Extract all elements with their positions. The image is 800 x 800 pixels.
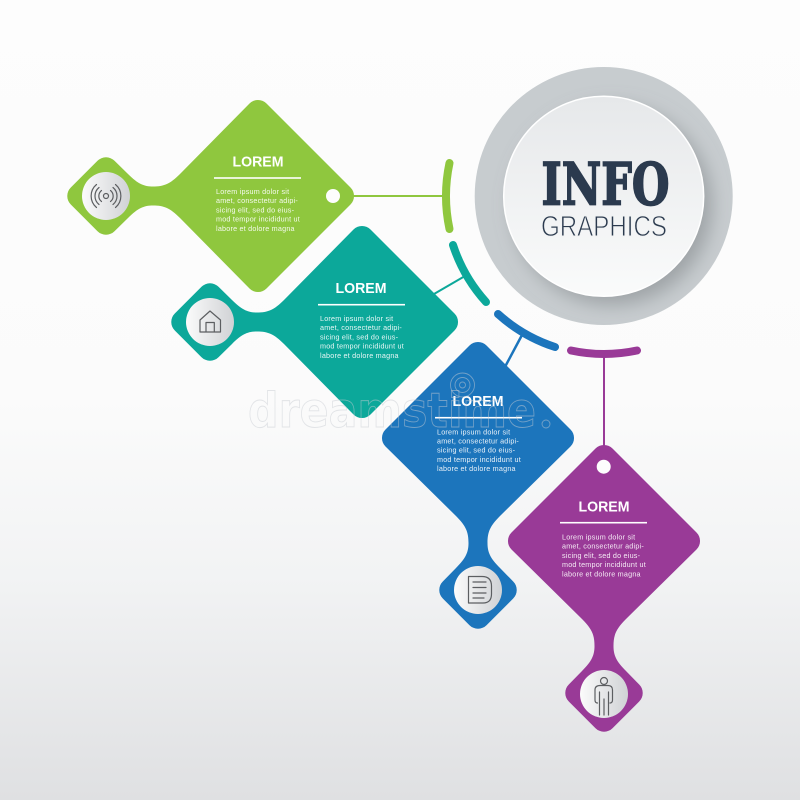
body text: sicing elit, sed do eius- (320, 332, 399, 341)
heading rule (214, 177, 301, 179)
title: INFO: INFO (542, 150, 670, 218)
outer ring (475, 67, 733, 325)
body text: labore et dolore magna (320, 351, 399, 360)
arc: green (354, 163, 450, 229)
watermark registered mark (542, 420, 550, 428)
body text: sicing elit, sed do eius- (437, 446, 516, 455)
arc: teal (434, 245, 486, 302)
body text: mod tempor incididunt ut (437, 455, 521, 464)
icon button: person (580, 670, 628, 718)
watermark: dreamstime (248, 383, 536, 439)
panel: teal (171, 226, 458, 418)
body text: Lorem ipsum dolor sit (320, 314, 393, 323)
body text: mod tempor incididunt ut (320, 342, 404, 351)
heading: LOREM (452, 393, 504, 410)
body text: labore et dolore magna (437, 464, 516, 473)
connector lines and arcs (354, 163, 637, 445)
heading rule (318, 304, 405, 306)
icon button: signal (82, 172, 130, 220)
icon button: document (454, 566, 502, 614)
body text: labore et dolore magna (562, 569, 641, 578)
body text: amet, consectetur adipi- (216, 196, 298, 205)
body text: amet, consectetur adipi- (437, 436, 519, 446)
body text: amet, consectetur adipi- (320, 323, 402, 332)
purple kite shape (508, 445, 700, 732)
body text: Lorem ipsum dolor sit (216, 187, 289, 196)
icon button: house (186, 298, 234, 346)
body text: Lorem ipsum dolor sit (437, 427, 510, 436)
body text: sicing elit, sed do eius- (216, 205, 295, 214)
watermark spiral (450, 373, 474, 397)
panel: purple (508, 445, 700, 732)
arc: purple (571, 350, 637, 445)
body text: mod tempor incididunt ut (216, 215, 300, 224)
heading rule (560, 522, 647, 524)
disc shadow (512, 105, 712, 305)
body text: sicing elit, sed do eius- (562, 551, 641, 560)
heading rule (435, 417, 522, 418)
heading: LOREM (232, 154, 284, 170)
body text: amet, consectetur adipi- (562, 542, 644, 551)
inner disc (504, 96, 704, 296)
body text: Lorem ipsum dolor sit (562, 532, 635, 542)
body text: mod tempor incididunt ut (562, 560, 646, 569)
heading: LOREM (578, 498, 630, 516)
central circle (475, 67, 733, 325)
title: GRAPHICS: GRAPHICS (541, 211, 667, 243)
panel: green (67, 100, 354, 292)
teal kite shape (171, 226, 458, 418)
hole (597, 460, 611, 474)
blue kite shape (382, 342, 574, 629)
heading: LOREM (336, 280, 386, 297)
hole (326, 189, 340, 203)
green kite shape (67, 100, 354, 292)
panel: blue (382, 342, 574, 629)
arc: blue (498, 314, 555, 365)
body text: labore et dolore magna (216, 224, 295, 233)
